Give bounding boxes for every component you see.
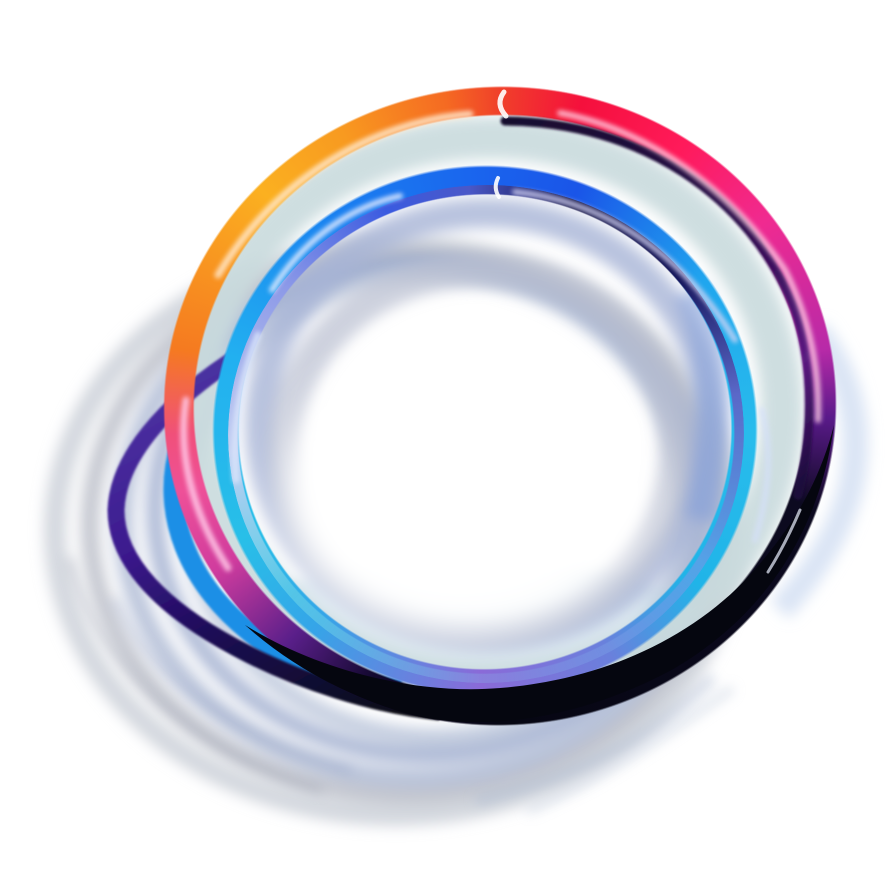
ring: inner ring dark and lilac inner edge <box>228 185 744 683</box>
ring: inner blue ring <box>212 165 758 690</box>
highlight: ring sheens <box>184 113 818 568</box>
ring: outer rainbow ring <box>163 86 837 726</box>
ring: black bottom crescent <box>245 425 834 722</box>
highlight: crescent sheen <box>768 510 800 572</box>
highlight: top notches <box>496 92 506 197</box>
ring: dark purple back arc <box>116 352 440 712</box>
background: white centre glow <box>284 355 640 635</box>
